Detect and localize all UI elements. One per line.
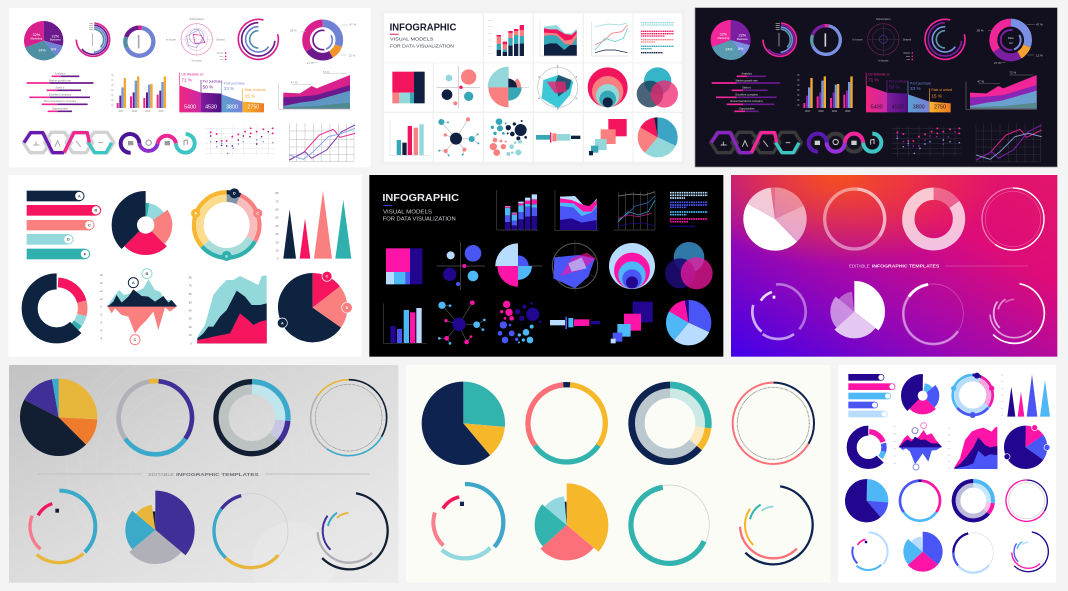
thick donut chart — [898, 184, 969, 254]
pie chart — [644, 123, 672, 151]
segmented donut with labels: 47 % — [1036, 22, 1043, 26]
segmented arcs — [842, 526, 894, 578]
ring chart — [513, 369, 621, 477]
panel: light dashboard — [9, 8, 371, 167]
template caption — [38, 472, 369, 478]
pie chart — [673, 307, 705, 339]
funnel area chart: Rate of arrival — [931, 88, 952, 92]
radar chart: Subscription — [189, 17, 204, 21]
funnel area chart: US Website on — [181, 72, 204, 76]
concentric partial arcs — [980, 279, 1049, 348]
funnel area chart: 50 % — [203, 85, 213, 90]
radar chart: Shared — [903, 37, 912, 41]
funnel area chart — [866, 72, 952, 112]
pie chart with labels: D — [346, 306, 349, 310]
funnel area chart: Post purchase — [910, 81, 931, 85]
mirrored mountain chart: -2 — [100, 312, 103, 316]
radar chart: Subscription — [876, 17, 891, 21]
template caption — [849, 264, 1028, 269]
stepped squares — [589, 119, 627, 155]
funnel area chart: 3800 — [226, 104, 238, 110]
funnel area chart: 50 % — [889, 85, 900, 90]
segmented donut with labels — [977, 16, 1043, 65]
treemap — [392, 72, 425, 103]
funnel area chart: US Website on — [868, 72, 890, 76]
concentric arcs — [234, 15, 283, 64]
pie chart with labels — [277, 271, 352, 332]
funnel area chart: 15 % — [931, 94, 942, 99]
funnel area chart: 33 % — [224, 86, 234, 91]
triangle chart: 20 — [275, 240, 279, 244]
segmented donut with labels — [290, 17, 356, 65]
mirrored mountain chart: -8 — [100, 336, 103, 340]
funnel area chart: Rate of arrival — [245, 88, 266, 92]
pie chart — [753, 197, 797, 241]
pie chart: 24% — [725, 48, 733, 52]
pie chart with labels: A — [281, 321, 284, 325]
venn diagram — [637, 67, 678, 108]
radar chart: In house — [852, 37, 863, 41]
template caption: INFOGRAPHIC TEMPLATES — [872, 264, 939, 269]
ring with labels: E — [225, 254, 228, 258]
pie chart: 32% — [720, 32, 728, 36]
panel: dark visual models — [369, 175, 723, 357]
pie chart with labels — [1004, 425, 1050, 462]
thin ring chart — [718, 368, 829, 479]
donut chart — [18, 270, 95, 347]
grouped bar chart: 2018 — [132, 111, 138, 113]
panel: visual models grid — [381, 10, 685, 165]
panel: blue pink chart set — [838, 365, 1056, 583]
donut chart — [845, 424, 892, 471]
stacked area chart — [966, 71, 1037, 109]
pie chart — [31, 390, 86, 445]
triangle chart: 10 — [275, 248, 279, 252]
stacked area chart — [278, 70, 350, 109]
bubble clusters — [490, 118, 527, 156]
funnel area chart: 3800 — [913, 104, 925, 110]
segmented donut with labels: 27 % — [994, 61, 1001, 65]
radar chart: Shared — [216, 37, 225, 41]
stacked bar chart — [488, 21, 524, 56]
layered area chart: 0 — [190, 341, 192, 345]
horizontal range bars: Recommended to company — [730, 99, 764, 103]
scatter plot — [205, 127, 275, 157]
triangle chart — [1001, 374, 1050, 417]
radar chart — [552, 240, 598, 292]
template caption: INFOGRAPHIC TEMPLATES — [176, 472, 260, 478]
stacked bar chart — [497, 190, 538, 230]
pie chart: 8% — [51, 48, 57, 52]
line chart — [976, 123, 1042, 162]
concentric partial arcs — [1005, 528, 1052, 575]
horizontal range bars: Excellent company — [49, 92, 72, 96]
concentric arcs — [921, 15, 969, 64]
thin ring chart — [998, 472, 1055, 529]
funnel area chart: 5400 — [871, 104, 883, 110]
ring with labels — [181, 179, 273, 271]
double donut chart — [616, 369, 724, 477]
panel: grey templates — [9, 365, 398, 582]
segmented donut with labels: Data — [1008, 36, 1014, 40]
multi line chart — [592, 22, 628, 56]
stacked area chart: 72 % — [323, 70, 330, 74]
stacked area chart: 47 % — [291, 80, 298, 84]
horizontal range bars: Recommended to company — [44, 99, 77, 103]
radar chart — [166, 17, 226, 62]
wave process chain — [809, 134, 881, 152]
funnel area chart: 15 % — [245, 94, 255, 99]
radar chart — [852, 17, 912, 62]
grouped bar chart: 2019 — [145, 111, 151, 113]
labelled horizontal bars: D — [67, 237, 70, 242]
ring chart — [822, 186, 887, 251]
horizontal range bars: Opportunities — [739, 107, 755, 111]
pie chart: Business — [737, 37, 748, 41]
title block: FOR DATA VISUALIZATION — [390, 44, 454, 50]
layered area chart: 20 — [189, 325, 192, 329]
ring chart — [892, 473, 948, 529]
dotted bars — [670, 193, 708, 226]
pie chart: Marketing — [30, 37, 43, 41]
layered area chart: 80 — [189, 276, 192, 280]
grouped bar chart — [797, 75, 853, 113]
pie chart — [851, 485, 882, 516]
triangle chart — [275, 191, 351, 261]
mirrored mountain chart: B — [146, 271, 149, 276]
labelled horizontal bars: A — [78, 193, 81, 198]
double ring chart — [982, 188, 1044, 250]
pie chart: 22% — [739, 34, 747, 38]
funnel area chart: Per purchase — [889, 80, 909, 84]
radar chart: In house — [192, 58, 202, 62]
segmented arcs — [8, 476, 110, 578]
hexagon process chain — [23, 132, 114, 153]
hexagon process chain — [711, 132, 801, 153]
pie chart: 24% — [38, 48, 46, 52]
layered area chart: 10 — [189, 333, 192, 337]
title block: INFOGRAPHIC — [382, 193, 459, 204]
thin ring chart — [296, 365, 402, 471]
stepped squares — [611, 302, 653, 343]
mirrored mountain chart: +8 — [99, 273, 103, 277]
exploded pie — [909, 538, 937, 566]
funnel area chart: 71 % — [181, 78, 192, 83]
progress ring — [945, 524, 1002, 581]
funnel area chart: Post purchase — [224, 81, 245, 85]
layered area chart: 50 — [189, 300, 192, 304]
horizontal range bars: Market growth rate — [49, 78, 72, 82]
multi line chart — [613, 192, 655, 230]
donut chart — [121, 23, 158, 60]
labelled horizontal bars: B — [95, 208, 98, 213]
bubble clusters — [498, 301, 541, 343]
stacked area chart — [555, 190, 598, 231]
ring with labels: A — [194, 212, 197, 216]
radial arc chart — [75, 22, 111, 58]
double donut chart — [946, 473, 1001, 528]
triangle chart: 70 — [275, 199, 279, 203]
quarter polar chart — [488, 67, 529, 108]
ring with labels: C — [256, 212, 259, 216]
grouped bar chart: 2019 — [832, 111, 838, 113]
pie chart — [434, 394, 493, 453]
segmented arcs — [740, 274, 816, 350]
funnel area chart: 4530 — [205, 104, 217, 110]
mirrored mountain chart: A — [132, 280, 135, 285]
layered area chart — [189, 275, 267, 345]
funnel area chart — [179, 72, 266, 112]
segmented donut with labels: roll — [1009, 41, 1013, 45]
nested circles — [588, 67, 628, 107]
concentric partial arcs — [305, 486, 394, 576]
title block: VISUAL MODELS — [390, 37, 434, 43]
network graph — [438, 300, 486, 345]
layered area chart: 70 — [189, 284, 192, 288]
triangle chart: 0 — [277, 257, 279, 261]
layered area chart: 40 — [189, 308, 192, 312]
title block: INFOGRAPHIC — [390, 23, 456, 34]
radar chart: In house — [166, 37, 177, 41]
horizontal range bars: Analytics — [55, 71, 66, 75]
exploded pie — [131, 506, 179, 554]
funnel area chart: 71 % — [868, 78, 879, 83]
panel: dark dashboard — [695, 8, 1057, 167]
segmented donut with labels: 28 % — [290, 29, 297, 33]
radar chart: In house — [878, 58, 889, 62]
segmented arcs — [414, 471, 516, 573]
mirrored mountain chart — [893, 423, 942, 470]
mirrored mountain chart — [99, 269, 177, 345]
progress ring — [199, 479, 302, 583]
layered area chart — [948, 427, 997, 469]
labelled horizontal bars — [848, 374, 895, 417]
labelled horizontal bars: F — [84, 251, 87, 256]
bar chart — [383, 303, 427, 343]
horizontal range bars: Opportunities — [52, 107, 69, 111]
polar area pie — [122, 201, 170, 249]
mirrored mountain chart: +2 — [99, 297, 103, 301]
triangle chart: 50 — [275, 216, 279, 220]
panel: cream templates — [406, 365, 830, 583]
segmented donut with labels: 13 % — [307, 61, 314, 65]
stacked area chart — [540, 21, 577, 56]
exploded pie — [836, 293, 873, 330]
triangle chart: 60 — [275, 207, 279, 211]
scatter plot — [892, 127, 962, 157]
quadrant bubble chart — [437, 66, 480, 108]
strip bar chart — [536, 132, 580, 143]
ring chart — [104, 367, 206, 469]
triangle chart: 30 — [275, 232, 279, 236]
grouped bar chart — [111, 75, 166, 113]
title block: VISUAL MODELS — [383, 209, 432, 215]
quadrant bubble chart — [437, 242, 485, 290]
triangle chart: 40 — [275, 224, 279, 228]
progress ring — [618, 474, 720, 576]
donut chart — [807, 21, 845, 59]
mirrored mountain chart: -4 — [100, 320, 103, 324]
pie chart: 22% — [52, 34, 60, 38]
ring with labels — [944, 367, 1001, 423]
labelled horizontal bars — [27, 191, 101, 259]
progress ring — [892, 272, 975, 356]
labelled horizontal bars: C — [88, 222, 91, 227]
horizontal range bars: Excellent company — [736, 92, 758, 96]
segmented donut with labels: 28 % — [977, 29, 984, 33]
stacked area chart: 72 % — [1009, 71, 1016, 75]
funnel area chart: 2750 — [934, 104, 946, 110]
mirrored mountain chart: +6 — [99, 281, 103, 285]
stacked area chart: 47 % — [977, 80, 984, 84]
grouped bar chart: 2017 — [118, 111, 124, 113]
strip bar chart — [550, 317, 600, 329]
layered area chart: 30 — [189, 317, 192, 321]
mirrored mountain chart: -6 — [100, 328, 103, 332]
radial arc chart — [762, 22, 798, 58]
pie chart: 8% — [738, 47, 744, 51]
radar chart — [538, 65, 578, 110]
wave process chain — [121, 134, 195, 153]
title block: FOR DATA VISUALIZATION — [383, 217, 456, 223]
grouped bar chart: 2017 — [805, 111, 811, 113]
grouped bar chart: 2020 — [845, 111, 851, 113]
ring with labels: D — [233, 192, 236, 196]
pie chart: Business — [50, 38, 61, 42]
horizontal range bars: Analytics — [741, 71, 753, 75]
treemap — [386, 248, 422, 284]
segmented donut with labels: 12 % — [349, 53, 356, 57]
venn diagram — [665, 242, 713, 289]
mirrored mountain chart: +4 — [99, 289, 103, 293]
quarter polar chart — [495, 243, 542, 287]
funnel area chart: 33 % — [910, 86, 921, 91]
pie chart — [717, 26, 748, 54]
title block — [382, 193, 459, 223]
grouped bar chart: 2018 — [818, 111, 824, 113]
panel: coral navy chart set — [8, 175, 362, 357]
exploded pie — [542, 500, 592, 550]
layered area chart: 60 — [189, 292, 192, 296]
horizontal range bars — [712, 71, 780, 111]
horizontal range bars: Market growth rate — [736, 78, 758, 82]
pie chart: 32% — [33, 33, 41, 37]
double donut chart — [201, 367, 303, 468]
segmented donut with labels: 47 % — [349, 22, 356, 26]
funnel area chart: 4530 — [892, 104, 904, 110]
polar area pie — [907, 380, 938, 411]
concentric partial arcs — [726, 478, 820, 572]
mirrored mountain chart: 0 — [100, 304, 102, 308]
nested circles — [609, 243, 655, 289]
dotted bars — [641, 23, 674, 53]
pie chart — [30, 27, 61, 55]
grouped bar chart: 2020 — [158, 111, 164, 113]
horizontal range bars: Sales tr — [742, 85, 751, 89]
network graph — [438, 117, 479, 156]
horizontal range bars — [27, 71, 93, 111]
line chart — [289, 123, 355, 162]
template caption: EDITABLE — [148, 472, 175, 478]
segmented donut with labels: 12 % — [1036, 53, 1043, 57]
pie chart: Marketing — [717, 36, 730, 40]
mirrored mountain chart: C — [134, 337, 137, 342]
funnel area chart: 5400 — [184, 104, 196, 110]
template caption: EDITABLE — [849, 264, 870, 269]
title block — [390, 23, 456, 50]
panel: magenta gradient templates — [731, 175, 1057, 357]
funnel area chart: Per purchase — [203, 80, 223, 84]
triangle chart: 80 — [275, 191, 279, 195]
bar chart — [390, 120, 430, 155]
horizontal range bars: Sales tr — [55, 85, 65, 89]
pie chart with labels: C — [326, 275, 329, 279]
funnel area chart: 2750 — [247, 104, 259, 110]
